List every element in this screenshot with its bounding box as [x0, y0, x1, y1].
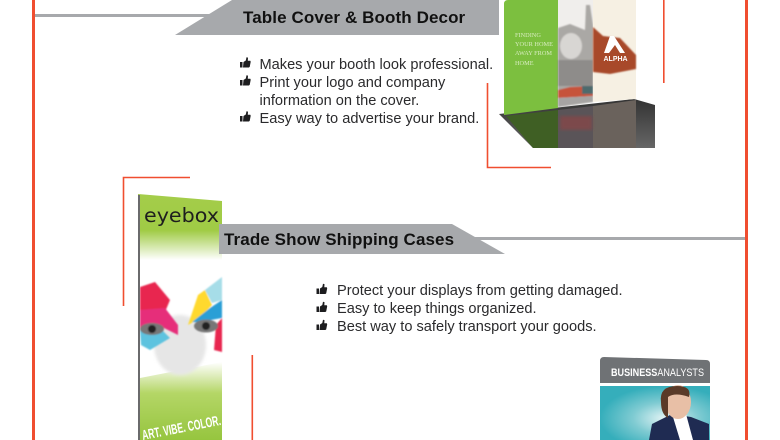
text: table cover bullets: information on the cover. — [260, 93, 419, 109]
image: booth display: ALPHA — [604, 56, 628, 63]
text: table cover bullets: Print your logo and company — [260, 75, 445, 91]
banner: shipping cases heading — [219, 224, 505, 254]
image: booth display: AWAY FROM — [515, 50, 552, 57]
banner: table cover heading — [175, 0, 499, 35]
image: business analysts display — [600, 357, 710, 440]
text: shipping cases bullets: Easy to keep things organized. — [337, 301, 537, 317]
image: booth display: FINDING — [515, 32, 541, 39]
text: shipping cases bullets: Best way to safely transport your goods. — [337, 319, 597, 335]
image: booth display: YOUR HOME — [515, 41, 553, 48]
heading: table cover and booth decor: Table Cover & Booth Decor — [243, 8, 465, 27]
left border line — [32, 0, 35, 440]
image: business analysts display: BUSINESSANALYSTS — [611, 367, 704, 379]
heading: trade show shipping cases: Trade Show Shipping Cases — [224, 230, 454, 249]
text: table cover bullets: Makes your booth look professional. — [260, 57, 493, 73]
text: table cover bullets: Easy way to advertise your brand. — [260, 111, 479, 127]
thumb icons: shipping cases bullets — [316, 284, 327, 330]
text: shipping cases bullets — [337, 283, 623, 335]
frame: eyebox lower right line — [252, 355, 253, 440]
image: booth display: HOME — [515, 60, 534, 67]
text: shipping cases bullets: Protect your displays from getting damaged. — [337, 283, 623, 299]
frame: booth lower left corner — [488, 83, 551, 168]
thumb icons: table cover bullets — [240, 57, 251, 122]
image: eyebox banner stand: eyebox — [144, 204, 219, 227]
right border line — [745, 0, 748, 440]
text: table cover bullets — [260, 57, 493, 127]
image: eyebox banner stand — [138, 194, 222, 440]
image: booth display — [499, 0, 655, 148]
frame: booth upper right line — [663, 0, 665, 83]
bottom heading connector line — [475, 237, 745, 240]
top heading connector line — [35, 14, 210, 17]
frame: eyebox upper left corner — [124, 178, 190, 306]
